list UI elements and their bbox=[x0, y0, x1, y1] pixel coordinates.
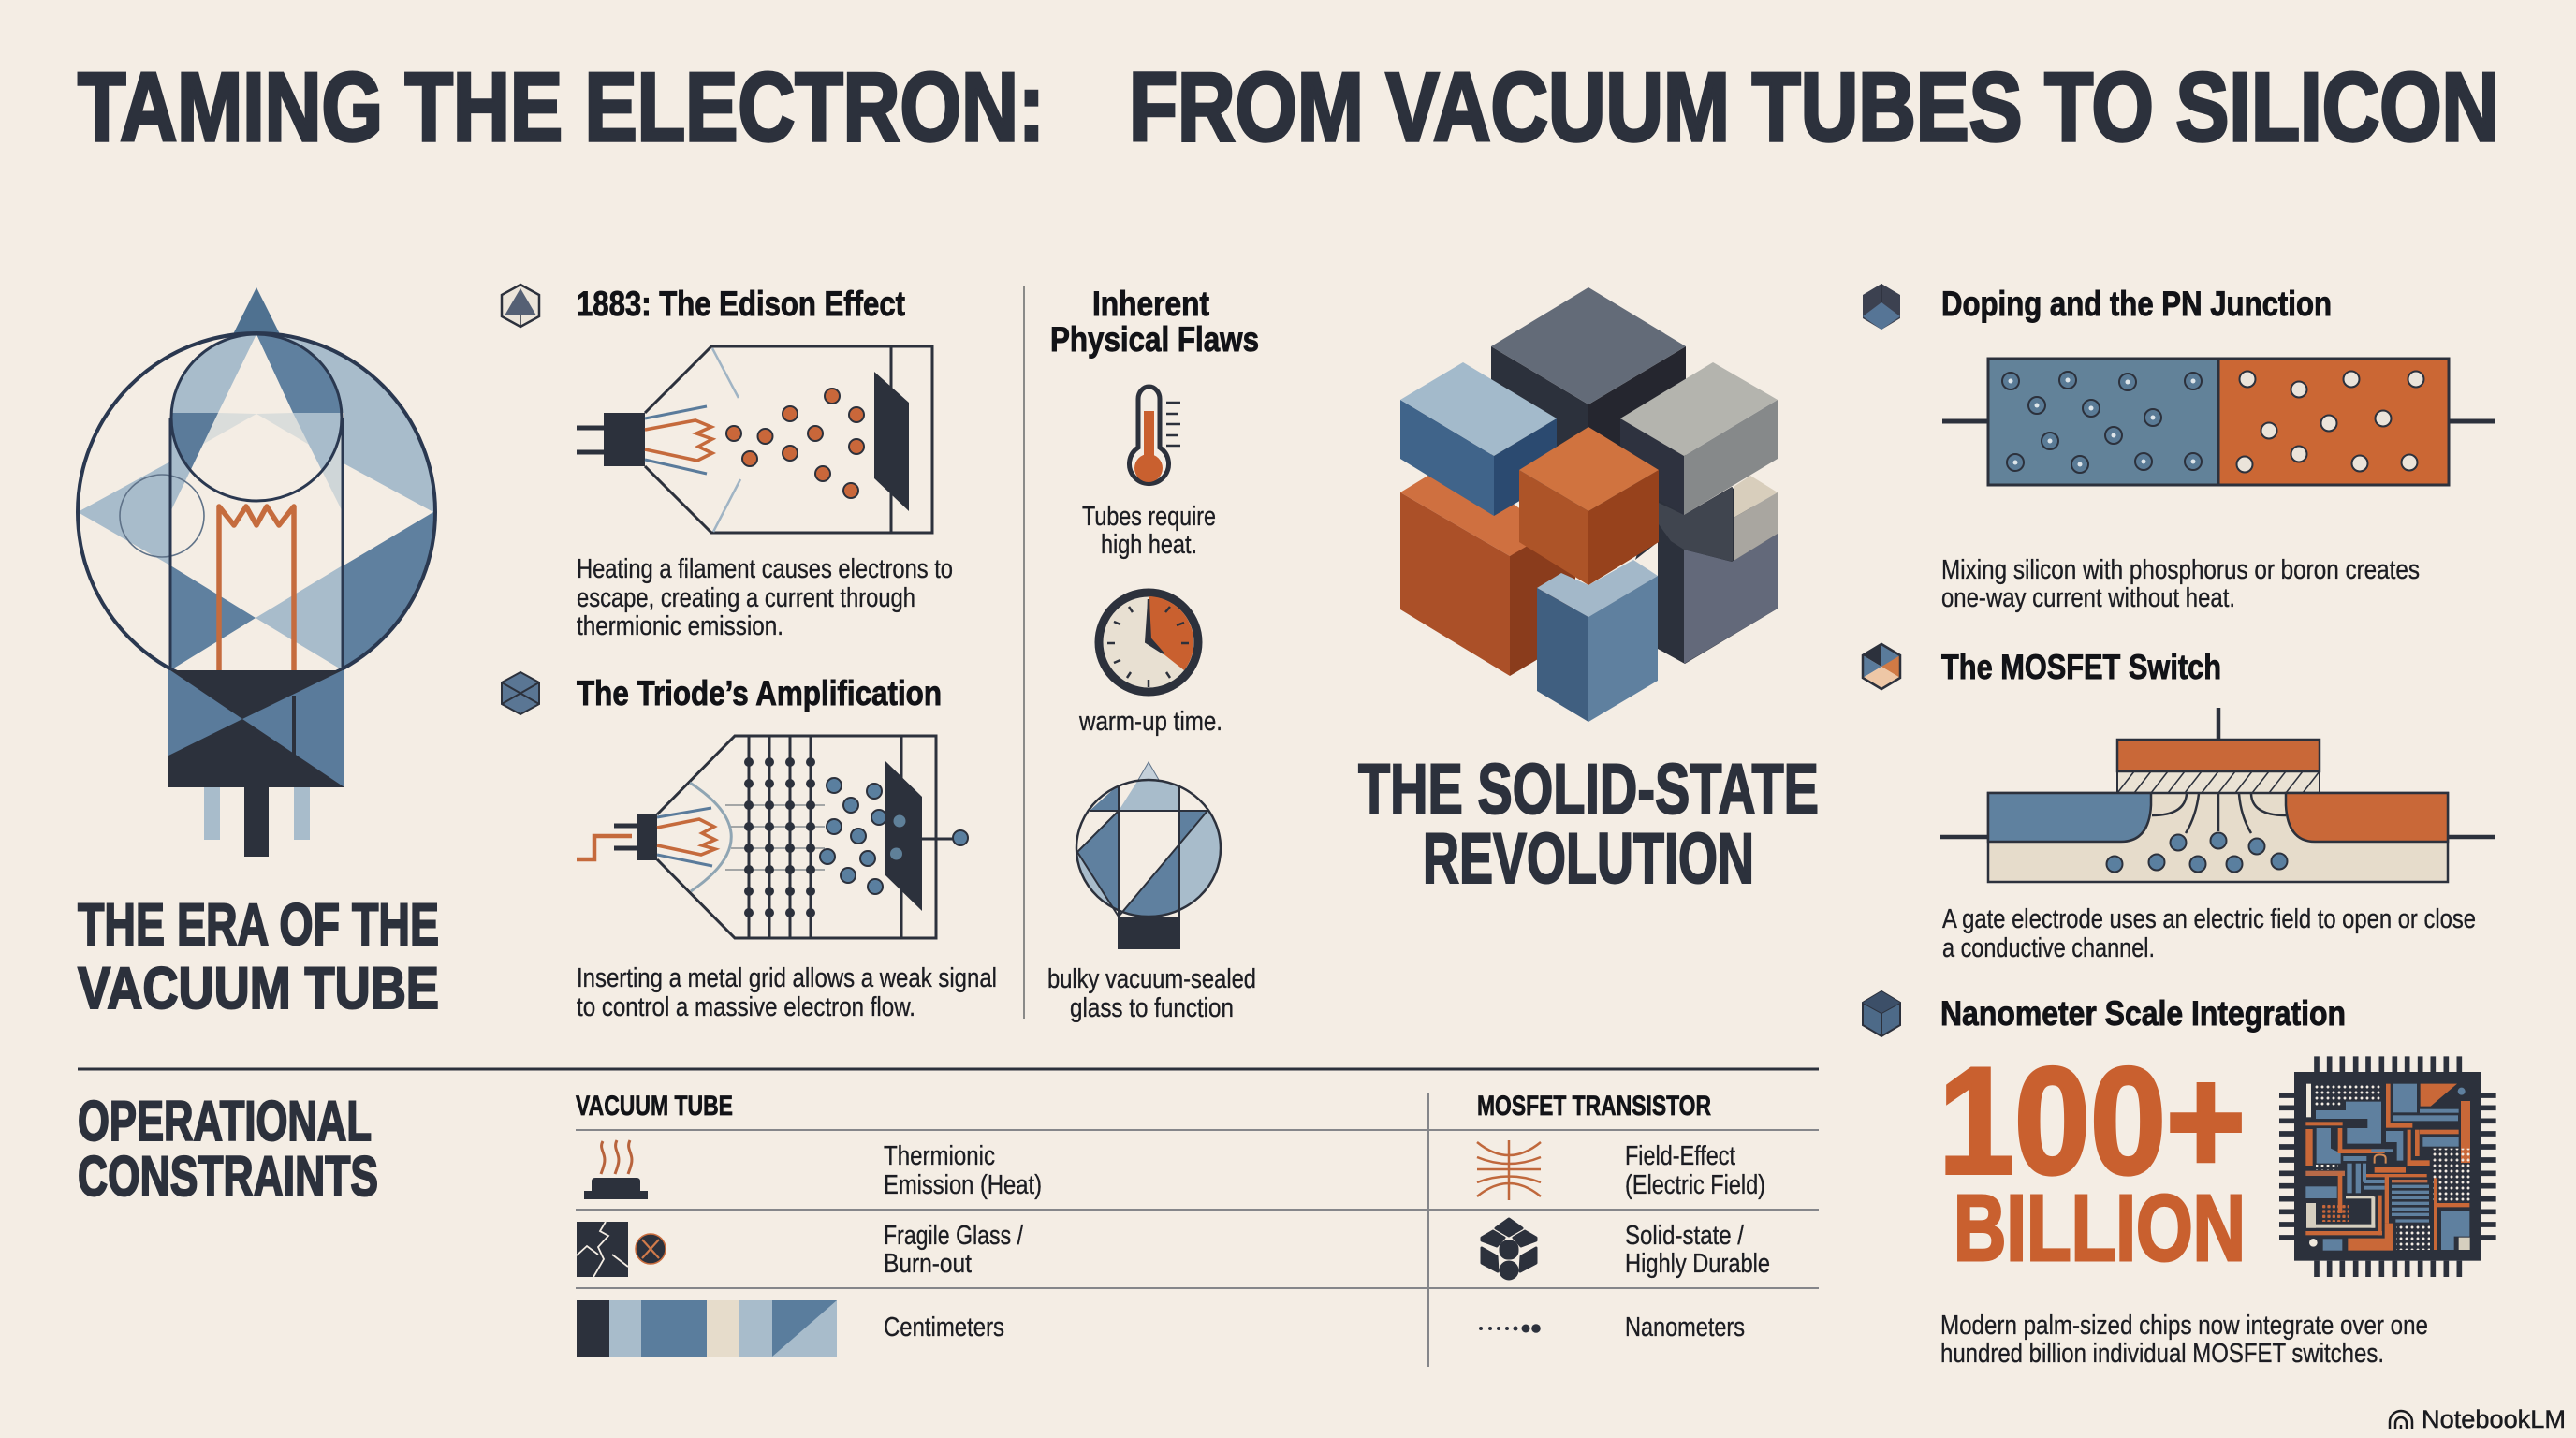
heading: Triode amplification: The Triode’s Amplification bbox=[577, 674, 942, 712]
heading: doping and PN junction: Doping and the PN Junction bbox=[1941, 285, 2332, 323]
small side circle bbox=[120, 475, 204, 557]
diagram: triode tube bbox=[577, 736, 968, 938]
heading: nanometer scale integration: Nanometer Scale Integration bbox=[1940, 994, 2346, 1033]
text: MOSFET description: a conductive channel. bbox=[1942, 933, 2155, 963]
text: MOSFET description bbox=[1942, 904, 2476, 963]
text: solid-state durable: Highly Durable bbox=[1625, 1249, 1770, 1279]
heading: 1883 Edison Effect: 1883: The Edison Effect bbox=[577, 285, 905, 323]
text: chip description bbox=[1940, 1311, 2428, 1369]
text: high heat bbox=[1082, 502, 1216, 560]
icon: field lines bbox=[1477, 1140, 1541, 1200]
text: chip description: hundred billion individual MOSFET switches. bbox=[1940, 1339, 2384, 1369]
text: Edison description: Heating a filament causes electrons to bbox=[577, 554, 953, 584]
text: fragile glass: Fragile Glass / bbox=[884, 1221, 1024, 1251]
text: solid-state durable bbox=[1625, 1221, 1770, 1279]
text: bulky glass bbox=[1047, 964, 1256, 1023]
text: bulky glass: bulky vacuum-sealed bbox=[1047, 964, 1256, 994]
icon: thermometer bbox=[1129, 387, 1180, 484]
text: thermionic emission: Thermionic bbox=[884, 1141, 995, 1171]
text: field effect: (Electric Field) bbox=[1625, 1170, 1765, 1200]
diagram: Edison effect bulb bbox=[577, 346, 932, 533]
title bbox=[78, 53, 2499, 162]
text: triode description: Inserting a metal grid allows a weak signal bbox=[577, 963, 997, 993]
heading: MOSFET switch: The MOSFET Switch bbox=[1941, 648, 2221, 686]
icon: isometric solid-state cubes bbox=[1400, 287, 1778, 722]
icon: small tube bbox=[1076, 762, 1226, 949]
heading: the solid-state revolution: THE SOLID-STATE bbox=[1358, 750, 1819, 829]
heading: the era of the vacuum tube bbox=[78, 892, 439, 1021]
icon: MOSFET hex bbox=[1863, 644, 1900, 689]
diagram: PN junction bbox=[1942, 359, 2496, 485]
icon: large vacuum tube illustration bbox=[78, 287, 449, 857]
heading: the era of the vacuum tube: VACUUM TUBE bbox=[78, 956, 439, 1021]
text: Edison description: thermionic emission. bbox=[577, 611, 783, 641]
stat: 100+ billion: BILLION bbox=[1954, 1176, 2246, 1281]
text: thermionic emission: Emission (Heat) bbox=[884, 1170, 1042, 1200]
text: triode description: to control a massive electron flow. bbox=[577, 992, 915, 1022]
text: Edison description bbox=[577, 554, 953, 641]
glass outlines bbox=[78, 333, 435, 691]
text: chip description: Modern palm-sized chips now integrate over one bbox=[1940, 1311, 2428, 1341]
title: TAMING THE ELECTRON: bbox=[78, 53, 1045, 162]
icon: doping hex bbox=[1863, 284, 1900, 330]
icon: microchip bbox=[2279, 1056, 2496, 1277]
text: fragile glass bbox=[884, 1221, 1024, 1279]
text: bulky glass: glass to function bbox=[1070, 993, 1234, 1023]
heading: flaws bbox=[1050, 285, 1259, 359]
base bbox=[168, 670, 344, 787]
stat: 100+ billion: 100+ bbox=[1939, 1036, 2246, 1206]
text: high heat: Tubes require bbox=[1082, 502, 1216, 532]
text: nanometers: Nanometers bbox=[1625, 1313, 1745, 1343]
column heading: MOSFET transistor: MOSFET TRANSISTOR bbox=[1477, 1091, 1711, 1122]
panel: operational constraints bbox=[78, 1069, 1819, 1367]
text: field effect: Field-Effect bbox=[1625, 1141, 1735, 1171]
icon: solid-state cube bbox=[1482, 1219, 1536, 1279]
diagram: MOSFET cross-section bbox=[1940, 708, 2496, 882]
icon: heat bbox=[584, 1140, 648, 1199]
icon: cracked glass and burnout bbox=[577, 1222, 666, 1277]
text: Edison description: escape, creating a current through bbox=[577, 583, 915, 613]
heading: the solid-state revolution: REVOLUTION bbox=[1423, 819, 1754, 899]
column heading: vacuum tube: VACUUM TUBE bbox=[576, 1091, 733, 1122]
text: field effect bbox=[1625, 1141, 1765, 1200]
text: triode description bbox=[577, 963, 997, 1022]
text: doping description bbox=[1941, 555, 2420, 613]
heading: operational constraints: OPERATIONAL bbox=[78, 1090, 372, 1152]
filament bbox=[219, 506, 294, 670]
heading: the solid-state revolution bbox=[1358, 750, 1819, 899]
text: thermionic emission bbox=[884, 1141, 1042, 1200]
icon: clock bbox=[1099, 593, 1198, 692]
heading: the era of the vacuum tube: THE ERA OF THE bbox=[78, 892, 439, 958]
icon: nanometer hex bbox=[1863, 991, 1900, 1036]
text: solid-state durable: Solid-state / bbox=[1625, 1221, 1745, 1251]
logo: NotebookLM: NotebookLM bbox=[2422, 1405, 2566, 1433]
icon: Edison hex bbox=[502, 285, 539, 327]
heading: flaws: Inherent bbox=[1092, 285, 1209, 323]
panel: inherent physical flaws bbox=[1047, 285, 1259, 1023]
text: centimeters: Centimeters bbox=[884, 1313, 1004, 1343]
icon: Triode hex bbox=[502, 672, 539, 714]
text: MOSFET description: A gate electrode uses an electric field to open or close bbox=[1942, 904, 2476, 934]
stat: 100+ billion bbox=[1939, 1036, 2246, 1281]
heading: operational constraints bbox=[78, 1090, 378, 1208]
pins bbox=[204, 787, 220, 840]
text: high heat: high heat. bbox=[1101, 530, 1197, 560]
text: fragile glass: Burn-out bbox=[884, 1249, 972, 1279]
text: doping description: one-way current without heat. bbox=[1941, 583, 2235, 613]
text: doping description: Mixing silicon with phosphorus or boron creates bbox=[1941, 555, 2420, 585]
heading: flaws: Physical Flaws bbox=[1050, 320, 1259, 359]
icon: centimetre blocks bbox=[577, 1300, 837, 1357]
icon: nanometer dots bbox=[1479, 1324, 1541, 1333]
text: warm-up time: warm-up time. bbox=[1078, 707, 1222, 737]
heading: operational constraints: CONSTRAINTS bbox=[78, 1145, 378, 1208]
